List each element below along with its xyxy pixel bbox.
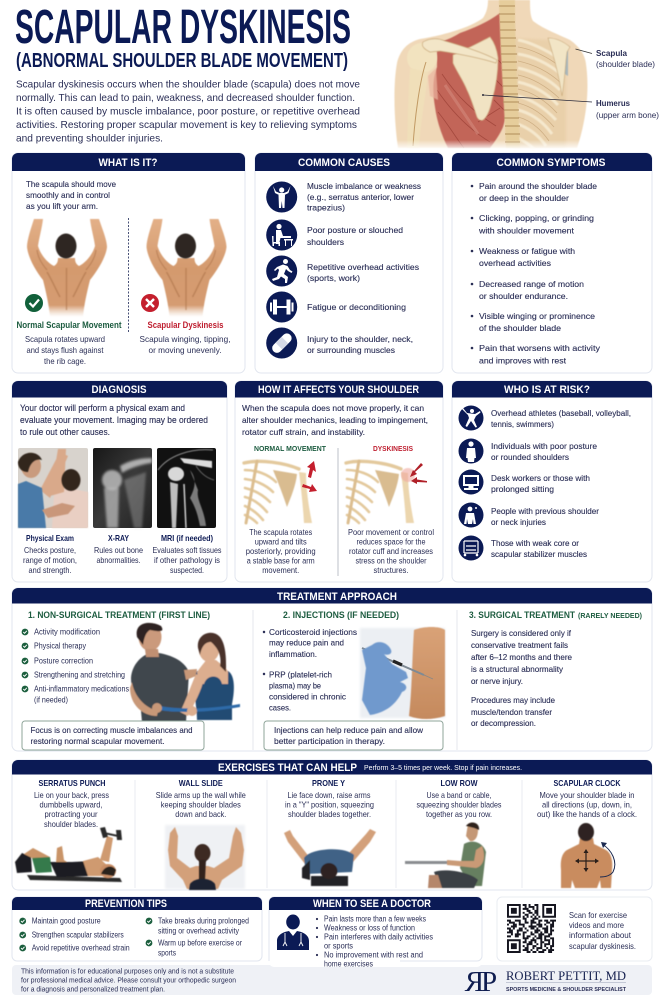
right scapula — [548, 38, 570, 96]
panel: what is it — [12, 153, 245, 373]
caption: x-ray — [94, 533, 143, 565]
illustration: low row — [405, 823, 486, 888]
caption: normal: posteriorly, providing — [246, 547, 316, 556]
arrow: posterior tilt — [302, 484, 317, 492]
surgical text: Procedures may include — [471, 695, 555, 705]
panel: diagnosis — [12, 381, 227, 582]
symptoms text: Clicking, popping, or grinding — [479, 213, 594, 223]
symptoms text: Pain around the shoulder blade — [479, 181, 597, 191]
exercise: scapular clock: all directions (up, down, in, — [542, 800, 632, 810]
normal description: and stays flush against — [26, 345, 104, 355]
caption: mri: suspected. — [170, 565, 204, 575]
caption: physical exam: Physical Exam — [26, 533, 74, 543]
normal description — [25, 334, 105, 366]
risk text: or rounded shoulders — [491, 452, 569, 462]
injections text: considered in chronic — [269, 692, 346, 702]
causes text: Fatigue or deconditioning — [307, 302, 406, 312]
pale deltoid shading — [428, 68, 438, 100]
tips right: sports — [158, 948, 176, 958]
tips right: sitting or overhead activity — [158, 926, 239, 936]
photo: mri — [157, 448, 216, 528]
column dividers — [135, 780, 522, 888]
exercise: scapular clock: Move your shoulder blade in — [540, 790, 635, 800]
subtitle: (ABNORMAL SHOULDER BLADE MOVEMENT) — [16, 50, 348, 72]
qr caption: scapular dyskinesis. — [569, 941, 636, 951]
surgical text: or nerve injury. — [471, 676, 523, 686]
caption: physical exam — [23, 533, 77, 575]
callout: injections: Injections can help reduce pain and allow — [274, 725, 424, 735]
caption: x-ray: abnormalities. — [96, 555, 140, 565]
injections text: Corticosteroid injections — [269, 627, 357, 637]
panel: common symptoms — [452, 153, 652, 373]
icon: desktop computer — [458, 470, 484, 494]
check icons — [19, 918, 152, 951]
photo: therapist and patient — [130, 623, 240, 722]
leader line: humerus — [482, 94, 592, 102]
exercise: prone y: PRONE Y — [312, 778, 345, 788]
subheading: surgical: 3. SURGICAL TREATMENT — [469, 610, 575, 620]
callout: non-surgical focus — [22, 721, 204, 750]
caption: dyskinesis: rotator cuff and increases — [349, 547, 433, 556]
risk text: scapular stabilizer muscles — [491, 549, 587, 559]
caption: physical exam: range of motion, — [23, 555, 77, 565]
symptoms text: or shoulder endurance. — [479, 291, 568, 301]
heading: COMMON SYMPTOMS — [496, 157, 606, 169]
scapula — [422, 37, 498, 120]
bullet dots — [316, 918, 318, 956]
panel: disclaimer and logo band — [12, 965, 652, 998]
symptoms text: overhead activities — [479, 258, 551, 268]
caption: normal: The scapula rotates — [249, 528, 312, 537]
label: humerus — [596, 98, 659, 120]
qr caption: Scan for exercise — [569, 910, 627, 920]
rib cage — [514, 38, 566, 148]
doctor list: home exercises — [324, 960, 373, 968]
heading: TREATMENT APPROACH — [277, 591, 397, 603]
disclaimer text: This information is for educational purposes only and is not a substitute — [21, 966, 234, 976]
icon: runner — [266, 256, 297, 286]
exercise: scapular clock — [537, 778, 637, 888]
causes text: Poor posture or slouched — [307, 225, 403, 235]
causes text: shoulders — [307, 237, 344, 247]
subheading: non-surgical: 1. NON-SURGICAL TREATMENT (FIRST LINE) — [28, 610, 210, 620]
humerus — [407, 43, 437, 148]
tips left: Avoid repetitive overhead strain — [32, 944, 130, 952]
intro text: Your doctor will perform a physical exam and — [20, 403, 185, 413]
illustration: normal scapula — [244, 461, 317, 523]
panel: prevention tips — [12, 897, 262, 961]
surgical text — [471, 628, 572, 728]
heading: WHEN TO SEE A DOCTOR — [313, 898, 431, 910]
label: scapula: Scapula — [596, 48, 627, 58]
injections text: may reduce pain and — [269, 638, 344, 648]
doctor list: Weakness or loss of function — [324, 924, 415, 932]
intro paragraph — [16, 80, 360, 144]
icon: person — [458, 438, 484, 464]
non-surgical list: Posture correction — [34, 656, 93, 666]
intro text: When the scapula does not move properly, it can — [242, 403, 424, 413]
logo mark: P — [481, 966, 497, 998]
intro text: evaluate your movement. Imaging may be ordered — [20, 415, 208, 425]
icon: overhead athlete — [458, 406, 484, 430]
exercise: prone y: shoulder blades together. — [288, 809, 371, 819]
risk text: Desk workers or those with — [491, 473, 590, 483]
doctor list: Pain lasts more than a few weeks — [324, 914, 426, 924]
non-surgical list: Strengthening and stretching — [34, 670, 125, 680]
subheading: surgical — [469, 610, 642, 620]
heading: EXERCISES THAT CAN HELP — [218, 762, 357, 774]
photo: physical exam — [18, 448, 88, 528]
doctor list — [324, 914, 433, 968]
exercise: low row: LOW ROW — [440, 778, 478, 788]
check icons — [22, 629, 28, 692]
exercise: wall slide: down and back. — [175, 809, 226, 819]
surgical text: muscle/tendon transfer — [471, 707, 552, 717]
label: scapula — [596, 48, 655, 69]
divider — [252, 610, 254, 750]
photo: normal back — [27, 219, 107, 317]
exercise: serratus punch: shoulder blades. — [44, 819, 98, 829]
doctor list: No improvement with rest and — [324, 950, 423, 960]
arrow: upward rotation — [307, 461, 316, 478]
callout: non-surgical focus: Focus is on correcting muscle imbalances and — [30, 725, 193, 735]
illustration: prone y — [284, 829, 376, 886]
logo name: ROBERT PETTIT, MD — [506, 968, 626, 983]
causes text: Injury to the shoulder, neck, — [307, 334, 413, 344]
callout: injections — [264, 721, 443, 750]
caption: x-ray: X-RAY — [108, 533, 129, 543]
caption: dyskinesis — [348, 528, 434, 575]
logo mark: R — [464, 966, 484, 998]
divider — [456, 610, 458, 750]
risk text: or neck injuries — [491, 517, 546, 527]
qr caption — [569, 910, 636, 951]
exercise: prone y: in a "Y" position, squeezing — [285, 800, 374, 810]
photo: injection — [360, 627, 445, 719]
symptoms text: Weakness or fatigue with — [479, 246, 575, 256]
heading: WHAT IS IT? — [98, 157, 158, 169]
exercise: wall slide: keeping shoulder blades — [161, 800, 241, 810]
intro text: to rule out other causes. — [20, 427, 110, 437]
callout: injections: better participation in therapy. — [274, 736, 385, 746]
doctor list: Pain interferes with daily activities — [324, 932, 433, 942]
illustration: dyskinesis scapula — [346, 461, 427, 523]
divider — [337, 448, 339, 576]
symptoms text: and improves with rest — [479, 356, 567, 366]
exercise: serratus punch: SERRATUS PUNCH — [38, 778, 106, 788]
risk text: tennis, swimmers) — [491, 419, 554, 429]
intro paragraph: activities. Restoring proper scapular movement is key to relieving symptoms — [16, 120, 357, 131]
intro paragraph: Scapular dyskinesis occurs when the shoulder blade (scapula) does not move — [16, 80, 360, 90]
icon: doctor — [277, 914, 309, 950]
non-surgical list: Activity modification — [34, 628, 100, 636]
exercise: low row: Use a band or cable, — [426, 790, 492, 800]
non-surgical list: Anti-inflammatory medications — [34, 684, 129, 694]
intro text — [242, 403, 428, 437]
caption: dyskinesis: reduces space for the — [356, 538, 426, 546]
intro paragraph: It is often caused by muscle imbalance, poor posture, or repetitive overhead — [16, 106, 360, 118]
causes text: (e.g., serratus anterior, lower — [307, 192, 414, 202]
subheading: injections: 2. INJECTIONS (IF NEEDED) — [283, 610, 399, 620]
heading: HOW IT AFFECTS YOUR SHOULDER — [258, 384, 419, 396]
photo: dyskinesis back — [146, 219, 226, 317]
risk text: Those with weak core or — [491, 538, 579, 548]
caption: x-ray: Rules out bone — [94, 545, 143, 555]
divider — [128, 218, 130, 333]
label: humerus: Humerus — [596, 98, 630, 108]
intro paragraph: normally. This can lead to pain, weakness, and decreased shoulder function. — [16, 93, 355, 104]
panel: treatment approach — [12, 588, 652, 751]
risk text: Individuals with poor posture — [491, 441, 597, 451]
symptoms text: Visible winging or prominence — [479, 311, 595, 321]
exercise: low row: squeezing shoulder blades — [416, 800, 502, 810]
caption: physical exam: Checks posture, — [24, 545, 76, 555]
exercise: prone y: Lie face down, raise arms — [288, 790, 370, 800]
risk text: prolonged sitting — [491, 484, 554, 494]
arrow: compression side — [411, 477, 427, 484]
heading: WHO IS AT RISK? — [504, 384, 590, 396]
label: normal: Normal Scapular Movement — [16, 320, 122, 330]
panel: who is at risk — [452, 381, 652, 582]
symptoms text: Pain that worsens with activity — [479, 343, 601, 353]
surgical text: after 6–12 months and there — [471, 652, 572, 662]
heading: COMMON CAUSES — [298, 157, 390, 169]
risk text: People with previous shoulder — [491, 506, 599, 516]
photo: x-ray — [93, 448, 152, 528]
icon: bandage — [266, 328, 297, 358]
illustration: wall slide — [165, 825, 245, 890]
panel: when to see a doctor — [269, 897, 482, 968]
qr caption: videos and more — [569, 920, 624, 930]
tips right: Warm up before exercise or — [158, 938, 242, 948]
qr caption: information about — [569, 930, 632, 940]
callout: non-surgical focus: restoring normal scapular movement. — [30, 736, 164, 746]
panel: how it affects your shoulder — [235, 381, 443, 582]
exercise: serratus punch: Lie on your back, press — [34, 790, 109, 800]
exercise: serratus punch: dumbbells upward, — [40, 800, 102, 810]
normal description: Scapula rotates upward — [25, 334, 105, 344]
dyskinesis description — [140, 334, 230, 355]
tips right: Take breaks during prolonged — [158, 916, 249, 926]
label: dyskinesis: DYSKINESIS — [373, 444, 413, 453]
heading: PREVENTION TIPS — [85, 898, 167, 910]
non-surgical list: Physical therapy — [34, 642, 86, 650]
disclaimer text: for a diagnosis and personalized treatment plan. — [21, 984, 165, 994]
arrow: compression top — [410, 463, 423, 477]
anatomy illustration: shoulder and rib cage — [390, 0, 590, 150]
illustration: serratus punch — [15, 827, 122, 882]
exercise: prone y — [284, 778, 376, 886]
injections text: PRP (platelet-rich — [269, 670, 332, 680]
disclaimer text: for professional medical advice. Please consult your orthopedic surgeon — [21, 976, 236, 984]
intro paragraph: and preventing shoulder injuries. — [16, 134, 163, 144]
bullet dots — [471, 185, 473, 349]
injections text: inflammation. — [269, 649, 317, 659]
panel: common causes — [255, 153, 443, 373]
disclaimer text — [21, 966, 236, 994]
exercise: scapular clock: SCAPULAR CLOCK — [554, 778, 620, 788]
surgical text: Surgery is considered only if — [471, 628, 572, 638]
exercise: wall slide: Slide arms up the wall while — [156, 790, 246, 800]
icon: arms raised figure — [266, 182, 297, 212]
caption: mri — [152, 533, 222, 575]
subheading: surgical: (RARELY NEEDED) — [578, 613, 642, 620]
causes text: trapezius) — [307, 202, 345, 212]
injections text — [263, 627, 357, 712]
icon: dumbbell — [266, 292, 297, 322]
frequency note: Perform 3–5 times per week. Stop if pain increases. — [364, 763, 522, 772]
injections text: plasma) may be — [269, 680, 321, 690]
doctor list: or sports — [324, 942, 353, 950]
intro text — [26, 179, 116, 211]
body silhouette — [394, 0, 587, 148]
causes text: or surrounding muscles — [307, 345, 395, 355]
caption: dyskinesis: Poor movement or control — [348, 528, 434, 537]
symptoms text: of the shoulder blade — [479, 323, 561, 333]
bottom fade — [390, 140, 590, 150]
caption: dyskinesis: structures. — [374, 566, 408, 575]
label: dyskinesis: Scapular Dyskinesis — [148, 320, 224, 330]
causes text: (sports, work) — [307, 273, 360, 283]
qr code — [507, 904, 556, 953]
caption: dyskinesis: stress on the shoulder — [356, 556, 427, 566]
muscle layer — [433, 13, 512, 148]
symptoms text — [478, 181, 601, 366]
icon: x — [141, 294, 159, 312]
symptoms text: Decreased range of motion — [479, 279, 584, 289]
intro text: as you lift your arm. — [26, 201, 98, 211]
caption: mri: MRI (if needed) — [161, 533, 213, 543]
caption: normal: movement. — [262, 566, 299, 575]
tips left — [32, 916, 130, 952]
icon: check — [25, 294, 43, 312]
risk text: Overhead athletes (baseball, volleyball, — [491, 408, 631, 418]
icon: walker frame — [458, 536, 484, 560]
intro text: alter shoulder mechanics, leading to impingement, — [242, 415, 428, 425]
icon: injured person — [458, 502, 484, 528]
caption: normal: upward and tilts — [255, 538, 307, 546]
non-surgical list: (if needed) — [34, 696, 68, 704]
logo mark — [464, 966, 497, 998]
panel: qr code — [497, 897, 652, 961]
exercise: wall slide: WALL SLIDE — [179, 778, 223, 788]
title: SCAPULAR DYSKINESIS — [15, 1, 351, 54]
intro text — [20, 403, 208, 437]
icon: desk posture — [266, 220, 297, 250]
tips left: Maintain good posture — [32, 916, 101, 926]
label: normal movement: NORMAL MOVEMENT — [254, 444, 326, 453]
risk text — [491, 408, 631, 559]
injections text: cases. — [269, 702, 291, 712]
dyskinesis description: or moving unevenly. — [148, 345, 222, 355]
logo tagline: SPORTS MEDICINE & SHOULDER SPECIALIST — [506, 987, 627, 993]
exercise: scapular clock: out) like the hands of a clock. — [537, 809, 637, 819]
causes text — [307, 181, 421, 355]
caption: mri: Evaluates soft tissues — [152, 545, 222, 555]
caption: physical exam: and strength. — [28, 565, 72, 575]
exercise: low row — [405, 778, 502, 888]
causes text: Repetitive overhead activities — [307, 262, 419, 272]
normal description: the rib cage. — [44, 356, 86, 366]
exercise: low row: together as you row. — [426, 809, 492, 819]
causes text: Muscle imbalance or weakness — [307, 181, 421, 191]
caption: normal: a stable base for arm — [247, 556, 315, 566]
heading: DIAGNOSIS — [92, 384, 146, 396]
intro text: The scapula should move — [26, 179, 116, 189]
surgical text: conservative treatment fails — [471, 640, 568, 650]
illustration: bare back with arrows — [561, 823, 615, 888]
tips right — [158, 916, 249, 958]
symptoms text: with shoulder movement — [478, 226, 575, 236]
exercise: serratus punch: protracting your — [44, 809, 98, 819]
intro text: smoothly and in control — [26, 190, 110, 200]
surgical text: or decompression. — [471, 718, 536, 728]
spine — [499, 0, 520, 148]
label: scapula: (shoulder blade) — [596, 59, 655, 69]
symptoms text: or deep in the shoulder — [479, 193, 569, 203]
label: humerus: (upper arm bone) — [596, 110, 659, 120]
exercise: serratus punch — [15, 778, 122, 882]
exercise: wall slide — [156, 778, 246, 890]
surgical text: is a structural abnormality — [471, 664, 564, 674]
dyskinesis description: Scapula winging, tipping, — [140, 334, 230, 344]
tips left: Strengthen scapular stabilizers — [32, 930, 124, 940]
non-surgical list — [34, 628, 129, 704]
caption: normal — [246, 528, 316, 575]
caption: mri: if other pathology is — [154, 555, 220, 565]
panel: exercises that can help — [12, 760, 652, 890]
intro text: rotator cuff strain, and instability. — [242, 427, 365, 437]
leader line: scapula — [576, 49, 592, 54]
